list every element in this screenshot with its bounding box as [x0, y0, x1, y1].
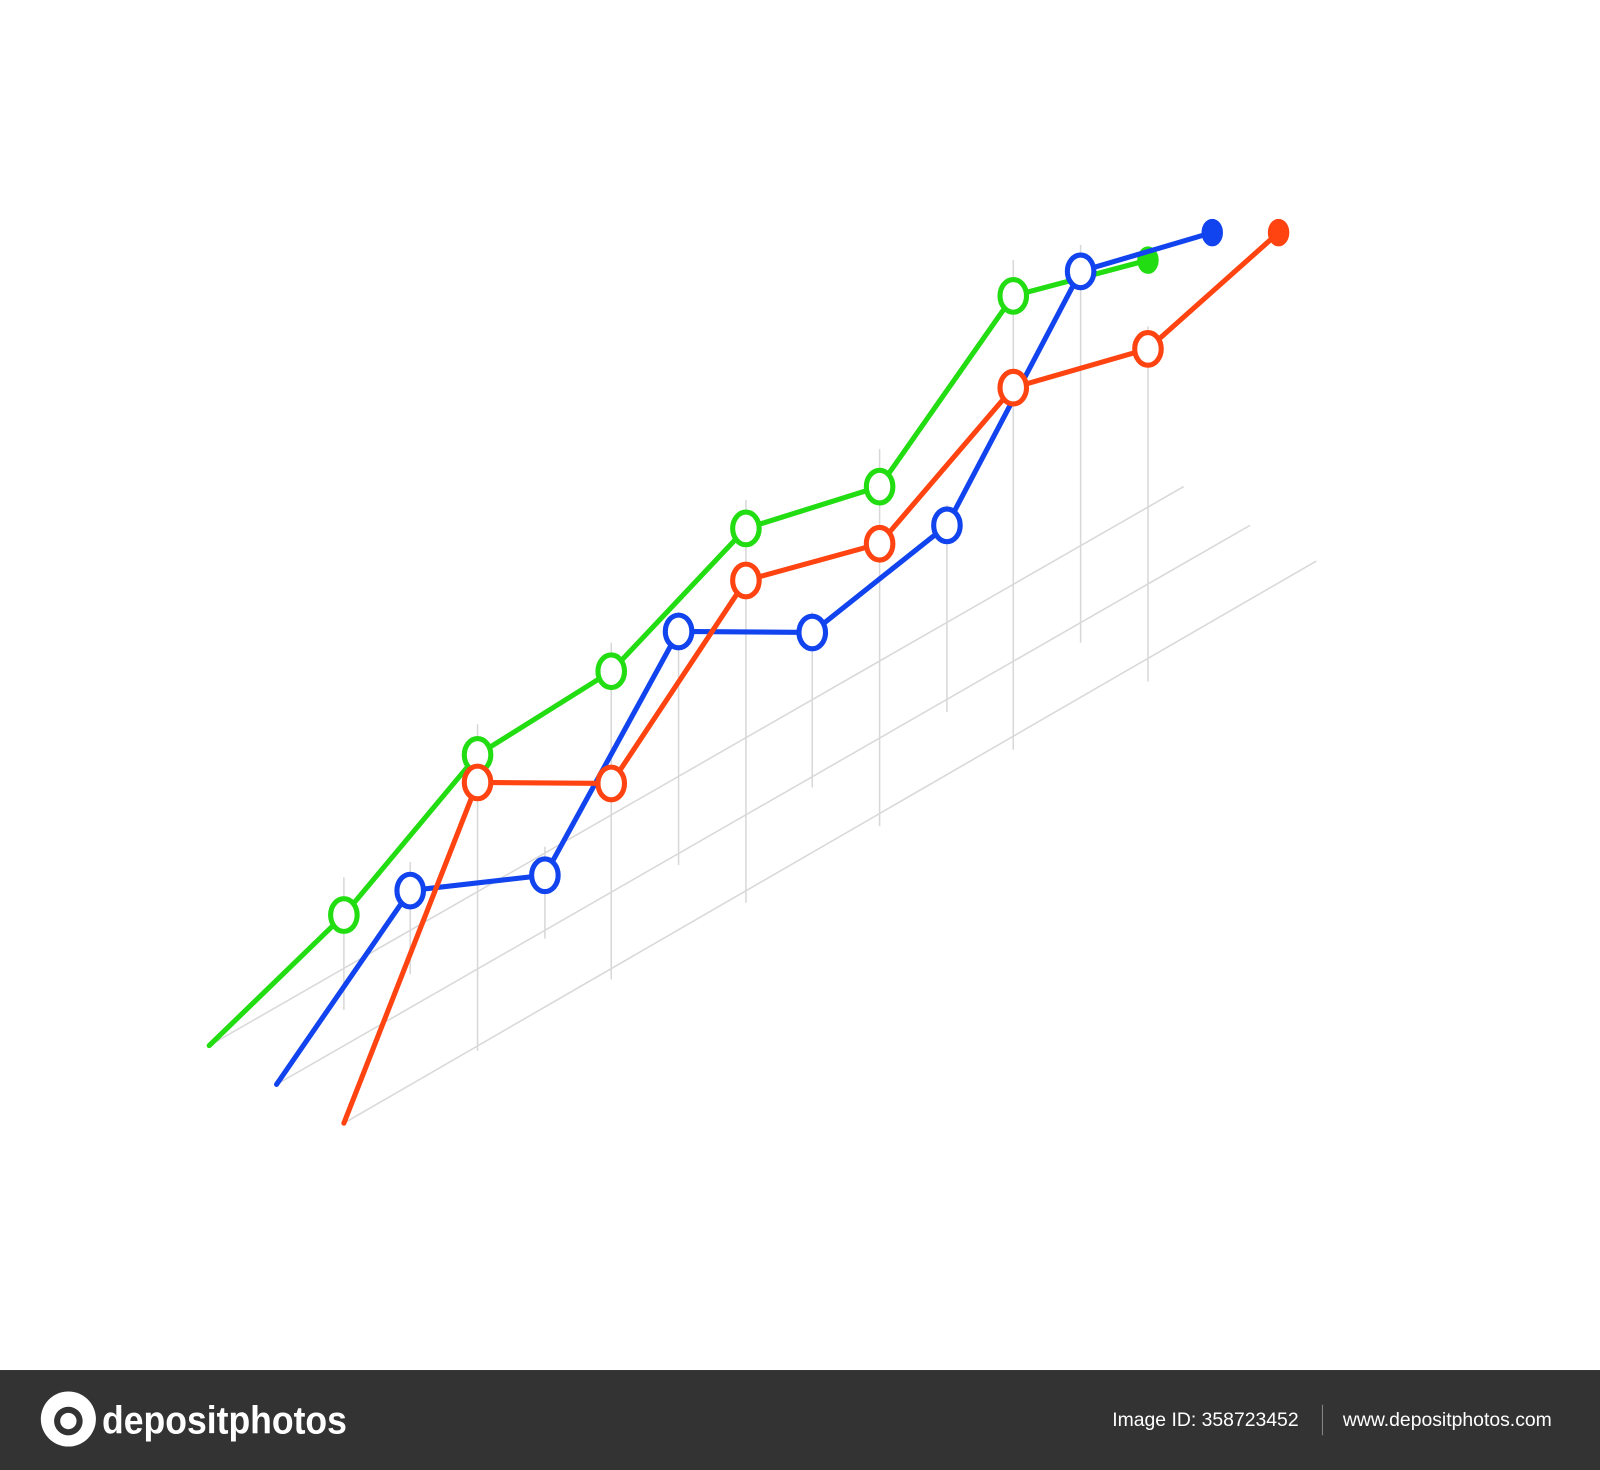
footer bar — [0, 1370, 1600, 1470]
icon: logo camera — [41, 1391, 96, 1447]
footer url: www.depositphotos.com — [1342, 1409, 1552, 1431]
line: green series — [209, 249, 1156, 1046]
footer brand text: depositphotos — [102, 1399, 347, 1442]
line: red series — [344, 221, 1287, 1123]
chart grid — [209, 245, 1316, 1123]
line: blue series — [277, 221, 1220, 1084]
footer image id: Image ID: 358723452 — [1112, 1409, 1299, 1431]
